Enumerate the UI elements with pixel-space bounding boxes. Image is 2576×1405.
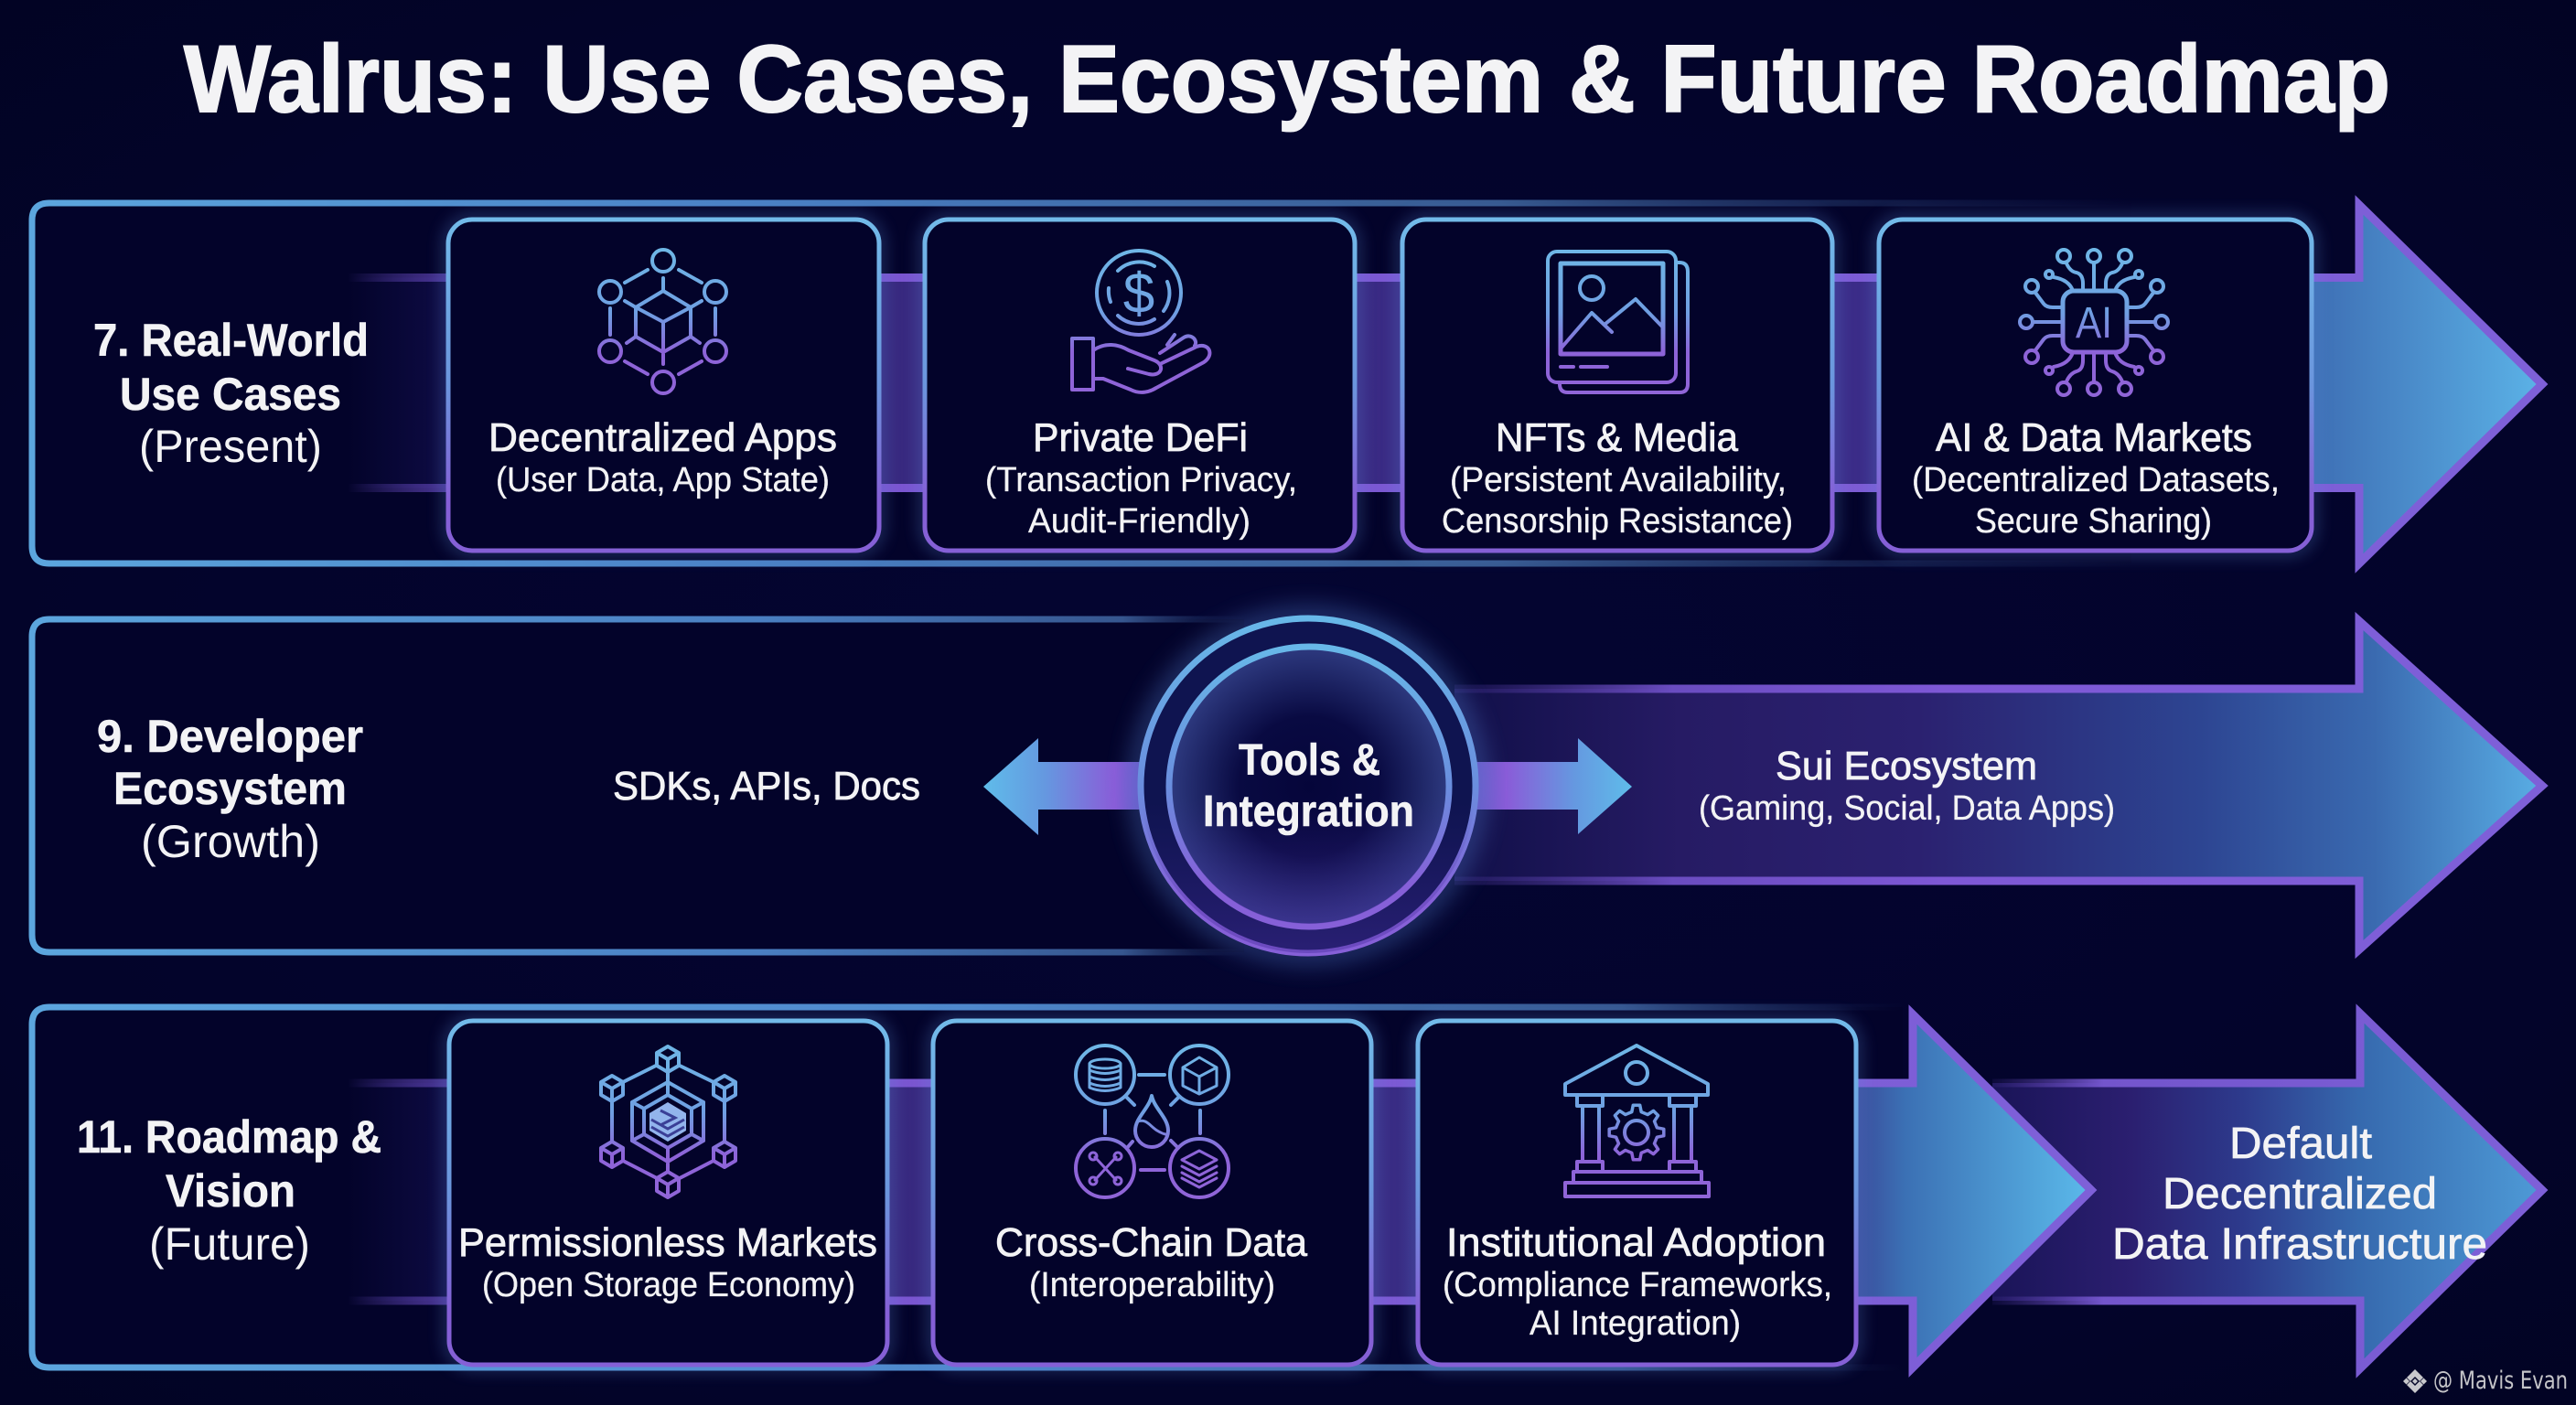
card text: Censorship Resistance)	[1442, 502, 1793, 541]
roadmap arrow	[348, 1014, 2091, 1367]
final arrow text: Decentralized	[2163, 1170, 2437, 1218]
panel: real-world use cases	[32, 203, 2542, 563]
icon: storage core	[649, 1102, 686, 1142]
row label: 9. Developer	[97, 711, 363, 762]
row label: (Growth)	[141, 816, 320, 867]
card text: AI Integration)	[1530, 1304, 1741, 1343]
card text	[458, 1220, 877, 1304]
icon: network cube	[599, 250, 726, 393]
row label: 11. Roadmap &	[77, 1111, 381, 1163]
icon: coin and hand	[1072, 251, 1209, 392]
card text	[985, 415, 1297, 541]
title: Walrus: Use Cases, Ecosystem & Future Roadmap	[184, 27, 2390, 133]
row frame	[32, 619, 1244, 952]
icon: watermark diamond	[2403, 1369, 2427, 1393]
card text: Audit-Friendly)	[1028, 502, 1250, 541]
row label: Vision	[166, 1165, 295, 1217]
row label: (Present)	[139, 421, 322, 472]
final arrow text	[2112, 1120, 2487, 1269]
watermark	[2403, 1367, 2568, 1395]
card: institutional adoption	[1418, 1021, 1856, 1365]
row label: Ecosystem	[113, 763, 347, 814]
icon: AI letters: AI	[2076, 299, 2112, 348]
card: ai and data markets	[1879, 220, 2312, 551]
card text	[1442, 415, 1793, 541]
card text: (Transaction Privacy,	[985, 461, 1297, 499]
card text: Private DeFi	[1033, 415, 1248, 460]
row label: Use Cases	[120, 369, 341, 420]
central hub	[1140, 617, 1476, 954]
panel: roadmap and vision	[32, 1007, 2542, 1368]
sui ecosystem text: Sui Ecosystem	[1776, 744, 2037, 788]
sui ecosystem text	[1699, 744, 2115, 828]
card text	[1443, 1220, 1832, 1343]
row frame	[32, 203, 2131, 563]
icon: institution building	[1565, 1046, 1709, 1196]
row label: (Future)	[149, 1218, 310, 1270]
card text	[488, 415, 837, 499]
card text: (Compliance Frameworks,	[1443, 1266, 1832, 1304]
row label	[93, 315, 369, 472]
left arrow	[983, 738, 1143, 835]
final arrow: default infrastructure	[1992, 1014, 2542, 1368]
panel: developer ecosystem	[32, 617, 2542, 954]
sui ecosystem arrow	[1454, 621, 2542, 949]
hub text: Integration	[1203, 788, 1414, 836]
right arrow	[1473, 738, 1632, 834]
shaft arrow	[348, 205, 2542, 563]
final arrow text: Default	[2229, 1120, 2372, 1168]
card text: Permissionless Markets	[458, 1220, 877, 1265]
card text: (Open Storage Economy)	[482, 1266, 855, 1304]
card text	[995, 1220, 1308, 1304]
final arrow text: Data Infrastructure	[2112, 1220, 2487, 1269]
icon: ai chip	[2020, 250, 2168, 395]
sui ecosystem text: (Gaming, Social, Data Apps)	[1699, 789, 2115, 828]
card: permissionless markets	[449, 1021, 887, 1365]
hub text	[1203, 736, 1414, 836]
card: private defi	[925, 220, 1355, 551]
icon: dollar sign: $	[1123, 263, 1154, 326]
card text: Cross-Chain Data	[995, 1220, 1308, 1265]
icon: image frame	[1548, 252, 1688, 392]
card text: Institutional Adoption	[1446, 1220, 1826, 1265]
icon: cube lattice	[601, 1046, 735, 1197]
card text: Secure Sharing)	[1975, 502, 2212, 541]
card: cross-chain data	[933, 1021, 1371, 1365]
card: nfts and media	[1402, 220, 1832, 551]
card text: AI & Data Markets	[1936, 415, 2252, 460]
icon: chain hub	[1076, 1046, 1229, 1197]
card: decentralized apps	[448, 220, 879, 551]
hub text: Tools &	[1239, 736, 1380, 785]
row label: 7. Real-World	[93, 315, 369, 366]
card text: NFTs & Media	[1496, 415, 1739, 460]
card text: (Interoperability)	[1029, 1266, 1275, 1304]
row label	[97, 711, 363, 867]
card text: Decentralized Apps	[488, 415, 837, 460]
card text: (User Data, App State)	[496, 461, 830, 499]
card text: (Decentralized Datasets,	[1912, 461, 2280, 499]
card text	[1912, 415, 2280, 541]
card text: (Persistent Availability,	[1450, 461, 1787, 499]
row frame	[32, 1007, 1903, 1367]
sdks text: SDKs, APIs, Docs	[613, 764, 920, 809]
row label	[77, 1111, 381, 1270]
